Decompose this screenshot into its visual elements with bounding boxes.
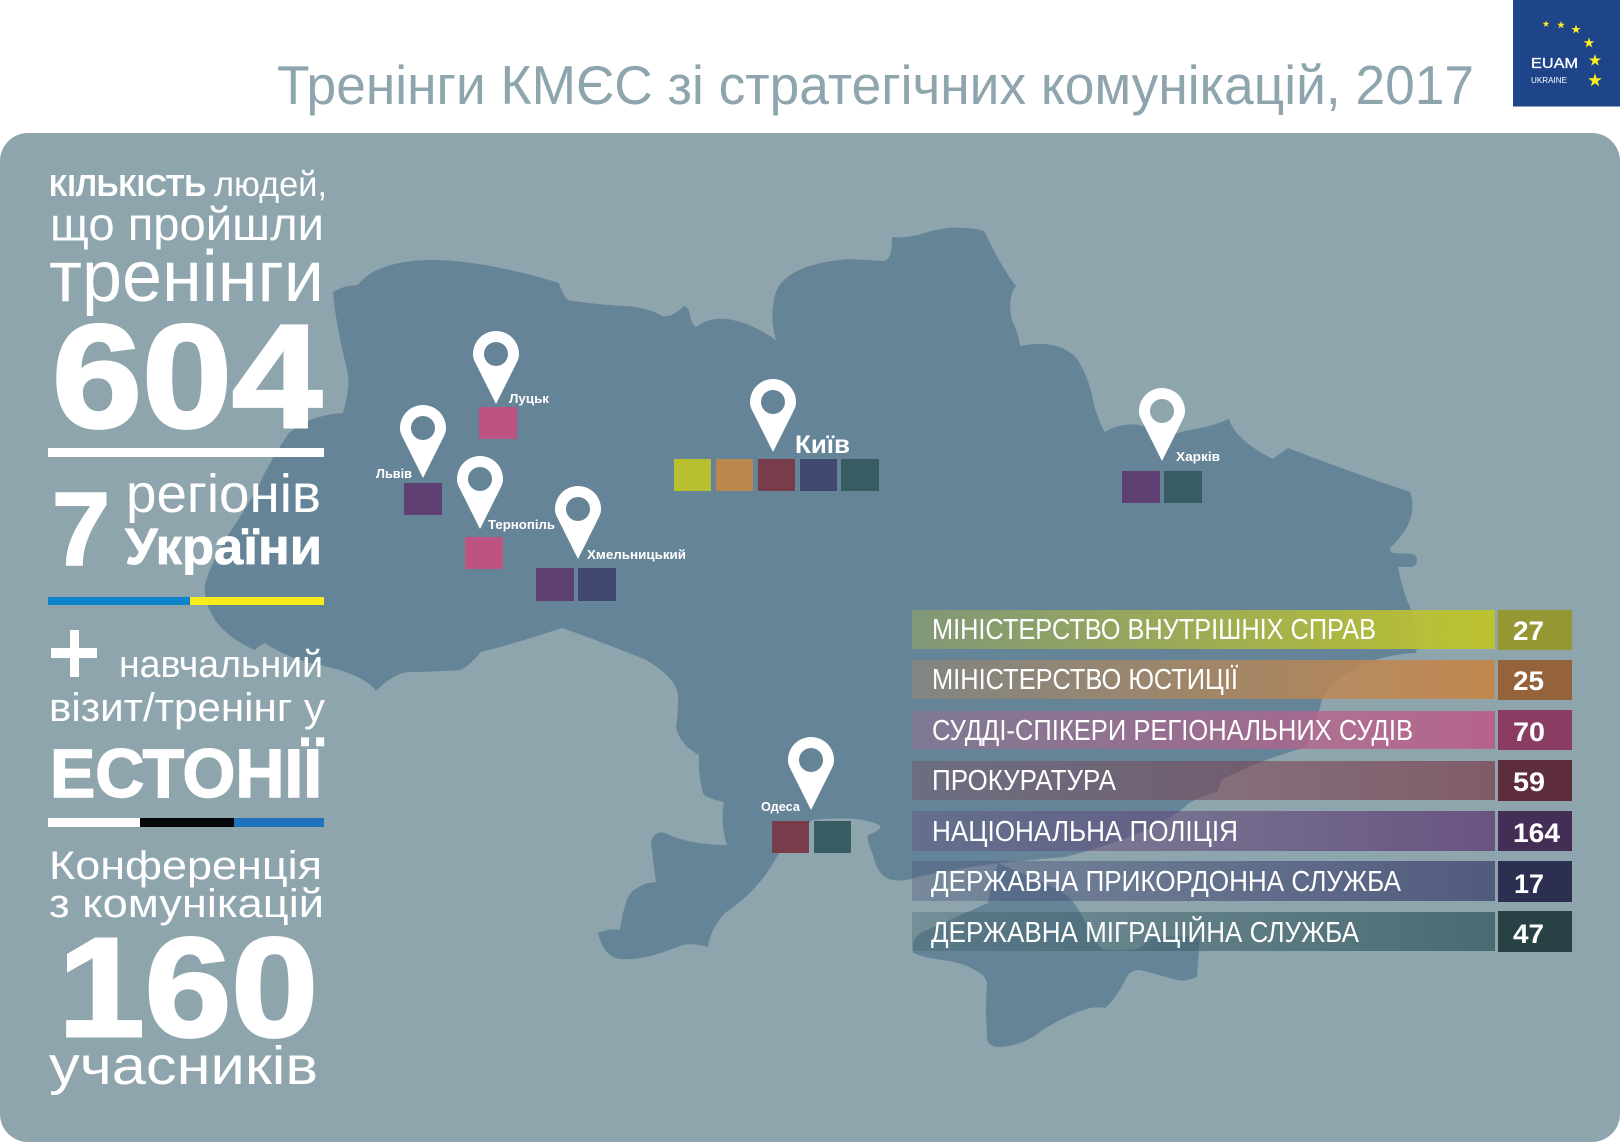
- map marker: Тернопіль: [457, 456, 555, 569]
- map marker: Одеса: [761, 737, 851, 853]
- logo: EUAM Ukraine: UKRAINE: [1531, 75, 1567, 85]
- stat: visit to Estonia: [49, 630, 325, 812]
- map marker: Луцьк: [473, 331, 550, 439]
- stat: visit to Estonia: візит/тренінг у: [49, 686, 325, 730]
- map marker: Луцьк: Луцьк: [509, 391, 550, 406]
- map marker: Харків: Харків: [1176, 449, 1220, 464]
- row: прикордонна служба: [912, 861, 1572, 902]
- map marker: Київ: Київ: [795, 431, 850, 459]
- heading: number of people: КІЛЬКІСТЬ: [49, 168, 206, 203]
- map marker: Хмельницький: [536, 486, 686, 601]
- heading: number of people: людей,: [214, 165, 327, 204]
- stats column: [48, 165, 327, 1096]
- stat: visit to Estonia: ЕСТОНІЇ: [50, 735, 324, 812]
- stat: 7 regions of Ukraine: 7: [52, 472, 110, 588]
- row: Мін'юст: МІНІСТЕРСТВО ЮСТИЦІЇ: [932, 664, 1238, 696]
- row: поліція: 164: [1513, 818, 1560, 848]
- row: прикордонна служба: 17: [1514, 869, 1544, 899]
- row: міграційна служба: [912, 911, 1572, 952]
- row: прокуратура: ПРОКУРАТУРА: [932, 765, 1117, 797]
- stat: conference participants: з комунікацій: [49, 882, 324, 926]
- stat: 7 regions of Ukraine: України: [125, 518, 322, 575]
- row: міграційна служба: ДЕРЖАВНА МІГРАЦІЙНА СЛУЖБА: [931, 915, 1360, 949]
- row: поліція: НАЦІОНАЛЬНА ПОЛІЦІЯ: [932, 816, 1238, 848]
- stat: visit to Estonia: навчальний: [119, 644, 323, 686]
- row: судді: 70: [1513, 717, 1545, 747]
- map marker: Харків: [1122, 388, 1220, 503]
- row: судді: [912, 710, 1572, 750]
- logo: EUAM Ukraine: [1513, 0, 1620, 106]
- row: МВС: [912, 610, 1572, 650]
- map marker: Тернопіль: Тернопіль: [488, 517, 555, 532]
- heading: number of people: [49, 165, 327, 317]
- heading: number of people: тренінги: [49, 237, 324, 317]
- row: міграційна служба: 47: [1513, 919, 1544, 949]
- row: МВС: МІНІСТЕРСТВО ВНУТРІШНІХ СПРАВ: [932, 614, 1376, 646]
- logo: EUAM Ukraine: EUAM: [1531, 55, 1578, 72]
- row: Мін'юст: 25: [1513, 666, 1544, 696]
- row: прокуратура: [912, 760, 1572, 801]
- map marker: Львів: Львів: [376, 466, 412, 481]
- legend table: [912, 610, 1572, 952]
- row: судді: СУДДІ-СПІКЕРИ РЕГІОНАЛЬНИХ СУДІВ: [932, 715, 1413, 747]
- map marker: Одеса: Одеса: [761, 799, 801, 814]
- map: Ukraine silhouette: [205, 228, 1417, 1047]
- big number: 604: 604: [52, 295, 322, 459]
- stat: 7 regions of Ukraine: регіонів: [126, 464, 321, 524]
- stat: 7 regions of Ukraine: [52, 464, 322, 588]
- Ukrainian flag bar: [48, 597, 324, 605]
- row: прокуратура: 59: [1513, 767, 1545, 797]
- title: Тренінги КМЄС зі стратегічних комунікацій, 2017: [277, 54, 1474, 116]
- stat: conference participants: 160: [58, 908, 318, 1066]
- row: прикордонна служба: ДЕРЖАВНА ПРИКОРДОННА СЛУЖБА: [931, 866, 1402, 898]
- map marker: Хмельницький: Хмельницький: [587, 547, 686, 562]
- white divider: [48, 448, 324, 457]
- row: МВС: 27: [1513, 616, 1544, 646]
- stat: conference participants: учасників: [49, 1036, 318, 1096]
- stat: conference participants: [49, 844, 324, 1096]
- map marker: Київ: [674, 379, 879, 491]
- row: Мін'юст: [912, 660, 1572, 700]
- row: поліція: [912, 811, 1572, 851]
- map marker: Львів: [376, 405, 446, 515]
- Estonian flag bar: [48, 818, 324, 827]
- stat: conference participants: Конференція: [49, 844, 322, 888]
- heading: number of people: що пройшли: [50, 198, 324, 250]
